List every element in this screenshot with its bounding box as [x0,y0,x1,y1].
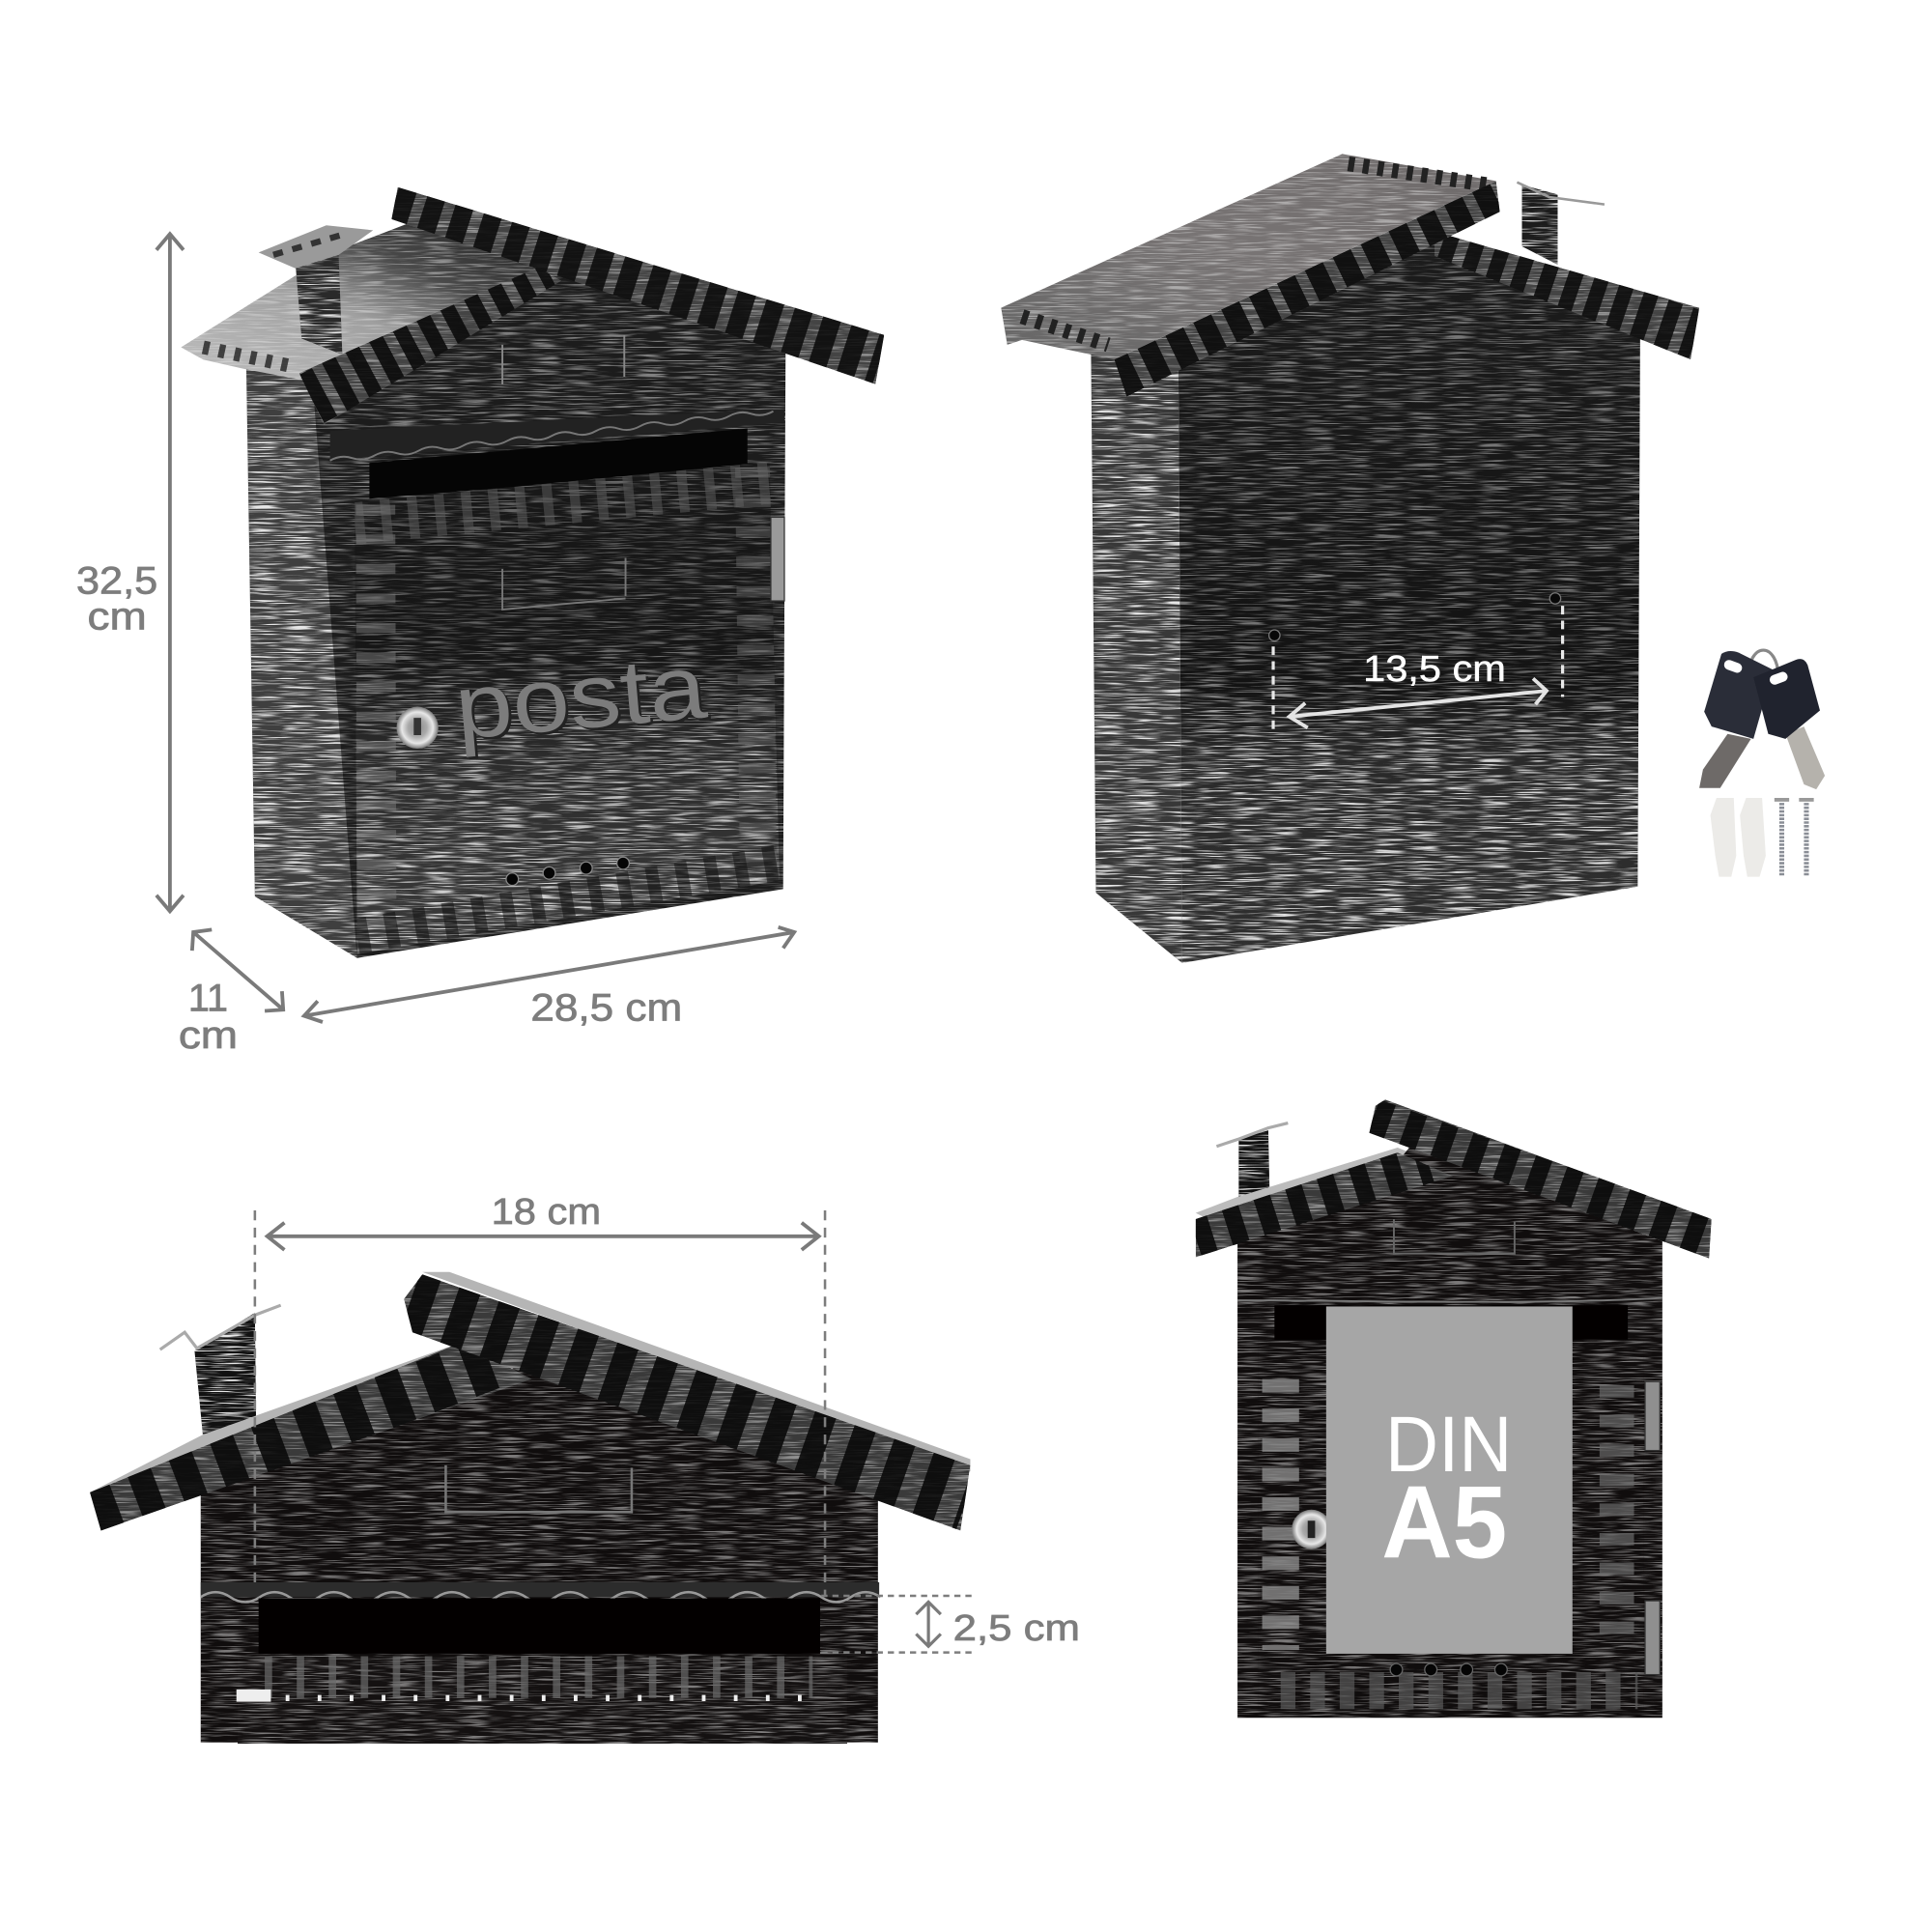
keys and fixings [1699,650,1825,877]
dimension: width [304,927,794,1022]
dashed guides [1273,606,1563,735]
dimension: height [156,234,184,911]
chimney [160,1305,281,1438]
label: 13,5 cm: 13,5 cm [1363,648,1506,690]
right roof fascia [1416,232,1699,359]
door top rib band [237,1656,847,1744]
embossed word posta: posta [451,636,711,758]
house body [1237,1139,1662,1718]
label: 28,5 cm: 28,5 cm [530,987,682,1030]
door panel [355,462,784,954]
awning strip [330,409,784,461]
roof left fascia [1115,181,1500,396]
mailbox: back view [1001,154,1699,963]
dotted slot guides [821,1596,976,1653]
door panel [1259,1340,1660,1712]
front face [314,252,785,958]
dimension: 13,5 cm arrow [1290,678,1547,727]
house body [201,1354,878,1743]
mailbox: DIN A5 front view [1196,1099,1712,1718]
roof left fascia [299,268,561,425]
chimney [1517,183,1605,265]
dimension: 18 cm arrow [268,1223,819,1250]
letter slot [369,429,748,498]
label: 32,5 cm: cm [88,595,147,638]
emboss panel [1394,1219,1515,1254]
lock [1292,1510,1331,1549]
roof left top edge [90,1342,493,1492]
label: 11 cm [179,978,238,1057]
key left [1699,651,1774,788]
label: DIN: DIN [1385,1401,1512,1489]
roof right fascia [1369,1099,1712,1259]
awning line [1237,1298,1662,1302]
roof left surface [181,224,538,380]
dashed guides [255,1210,825,1596]
mounting holes [1269,593,1561,640]
hinge [771,517,784,601]
emboss panel [445,1465,632,1512]
A5 sheet [1326,1306,1573,1654]
door ribbed frame [1281,1379,1637,1690]
embossed word posta: posta [454,638,713,760]
label: 11 cm: 11 [188,978,228,1020]
roof right fascia [391,187,884,384]
wall plugs [1711,798,1766,877]
side panel [1091,351,1182,963]
roof right top edge [422,1272,970,1471]
label: A5: A5 [1381,1463,1507,1579]
roof left fascia [1196,1152,1453,1257]
label: 18 cm: 18 cm [492,1191,601,1233]
roof surface [1001,154,1496,359]
lock [396,707,439,749]
dimension: depth [192,929,283,1011]
emboss panel on gable [502,335,624,384]
awning strip [201,1582,880,1602]
dimension: 2,5 cm arrow [916,1602,941,1646]
door ribbed frame [355,468,780,954]
mailbox: front three-quarter view [181,187,884,958]
embossed label plate [502,557,626,610]
screws [1775,798,1814,877]
roof left fascia [90,1342,532,1530]
key ring [1748,650,1778,699]
back panel [1179,234,1640,963]
label: 32,5 cm [76,559,157,638]
mailbox: slot detail view [90,1191,1080,1744]
roof right fascia [404,1274,970,1530]
label: 32,5 cm: 32,5 [76,559,157,602]
hinges [1645,1381,1660,1675]
letter slot [259,1599,820,1654]
chimney [259,225,373,355]
roof left top edge [1196,1148,1416,1221]
letter slot [1274,1305,1628,1342]
chimney [1216,1123,1288,1201]
label: 11 cm: cm [179,1014,238,1057]
ventilation holes [506,857,629,886]
key right [1753,659,1825,789]
label: 2,5 cm: 2,5 cm [953,1607,1080,1649]
side panel [246,367,357,958]
ventilation holes [1390,1663,1507,1676]
